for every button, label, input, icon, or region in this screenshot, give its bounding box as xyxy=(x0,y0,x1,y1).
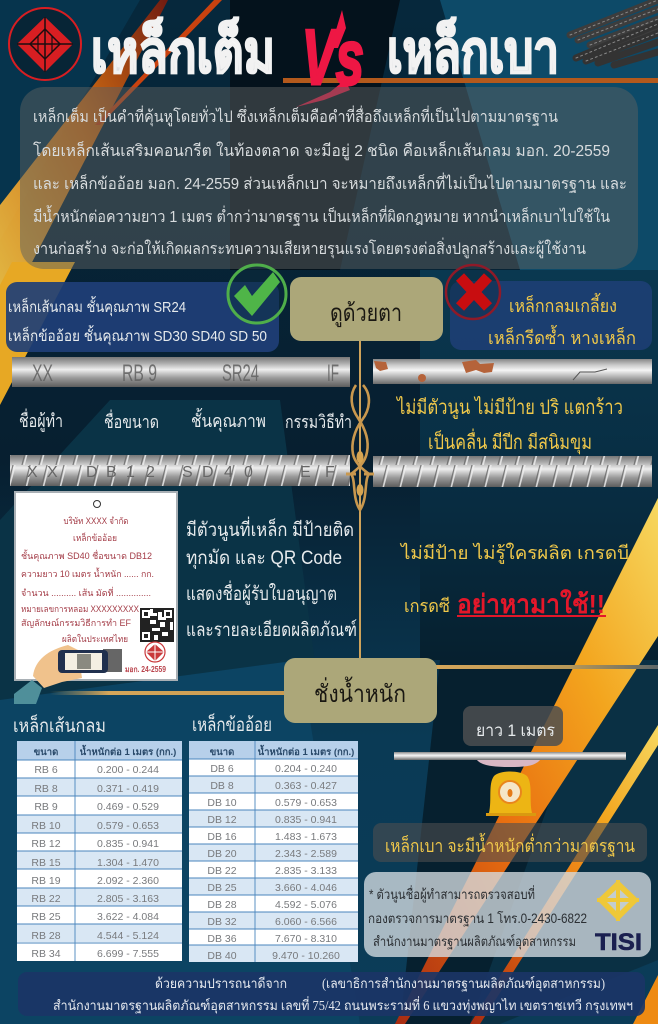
footer xyxy=(18,972,645,1016)
table: deformed bar weights: ขนาด xyxy=(210,747,234,758)
table: deformed bar weights: DB 22 xyxy=(207,865,237,877)
panel: standard steel grades xyxy=(6,282,279,352)
table: round bar weights: RB 25 xyxy=(31,911,61,923)
panel: introduction xyxy=(20,87,638,269)
panel: substandard steel types: เหล็กรีดซ้ำ หางเหล็ก xyxy=(488,325,636,348)
table: round bar weights: 4.544 - 5.124 xyxy=(97,930,159,942)
table: deformed bar weights: 0.363 - 0.427 xyxy=(275,780,337,792)
panel: substandard steel types: เหล็กกลมเกลี้ยง xyxy=(509,293,617,316)
icon: green check xyxy=(228,265,286,323)
marking labels: ชั้นคุณภาพ xyxy=(191,408,266,432)
table: round bar weights: RB 15 xyxy=(31,857,61,869)
card: product tag: จำนวน .......... เส้น มัดที่ .............. xyxy=(21,586,151,598)
icon: scale with bar xyxy=(394,752,626,816)
table: round bar weights: 0.469 - 0.529 xyxy=(97,801,159,813)
title: left: เหล็กเต็ม xyxy=(91,17,275,85)
table: deformed bar weights: DB 20 xyxy=(207,848,237,860)
intro text: เหล็กเต็ม เป็นคำที่คุ้นหูโดยทั่วไป ซึ่งเหล็กเต็มคือคำที่สื่อถึงเหล็กที่เป็นไปตามมาตรฐาน xyxy=(33,105,558,127)
table: deformed bar weights: 3.660 - 4.046 xyxy=(275,882,337,894)
defects description: เป็นคลื่น มีปีก มีสนิมขุม xyxy=(428,428,592,455)
marking labels: ชื่อขนาด xyxy=(104,409,159,432)
table: deformed bar weights: DB 25 xyxy=(207,882,237,894)
icon: QR code xyxy=(140,608,174,642)
table: deformed bar weights: DB 36 xyxy=(207,933,237,945)
table: round bar weights: 2.092 - 2.360 xyxy=(97,875,159,887)
ribbed bar: standard: X xyxy=(27,464,38,481)
table: deformed bar weights: DB 16 xyxy=(207,831,237,843)
tag and QR description: มีตัวนูนที่เหล็ก มีป้ายติด xyxy=(186,516,354,541)
panel: substandard steel types xyxy=(450,281,652,350)
smooth bar: standard: SR24 xyxy=(222,360,259,387)
warning text: เกรดซี xyxy=(404,596,450,616)
table: deformed bar weights: 2.835 - 3.133 xyxy=(275,865,337,877)
VS brush mark xyxy=(296,10,364,107)
callout: light steel underweight xyxy=(373,823,647,862)
icon: hand holding phone xyxy=(14,645,122,704)
table: round bar weights: RB 34 xyxy=(31,948,61,960)
marking labels: ชื่อผู้ทำ xyxy=(19,408,63,432)
footer: (เลขาธิการสำนักงานมาตรฐานผลิตภัณฑ์อุตสาหกรรม) xyxy=(322,975,605,992)
ribbed bar: standard: 4 xyxy=(224,464,233,481)
table: round bar weights: RB 19 xyxy=(31,875,61,887)
card: product tag: เหล็กข้ออ้อย xyxy=(73,531,117,543)
warning text: ไม่มีป้าย ไม่รู้ใครผลิต เกรดบี xyxy=(399,542,629,564)
warning text xyxy=(399,542,629,619)
table: round bar weights: 0.200 - 0.244 xyxy=(97,764,159,776)
ribbed bar: standard: D xyxy=(202,464,214,481)
table: round bar weights: RB 6 xyxy=(34,764,58,776)
table: round bar weights: RB 12 xyxy=(31,838,61,850)
card: product tag: มอก. 24-2559 xyxy=(125,665,166,674)
table: deformed bar weights xyxy=(189,741,358,962)
table: deformed bar weights: 4.592 - 5.076 xyxy=(275,899,337,911)
ribbed bar: standard: X xyxy=(47,464,58,481)
tag and QR description: แสดงชื่อผู้รับใบอนุญาต xyxy=(186,580,337,606)
ribbed bar: substandard xyxy=(373,456,652,487)
icon: TISI logo xyxy=(595,880,642,956)
panel: TISI contact: * ตัวนูนชื่อผู้ทำสามารถตรวจสอบที่ xyxy=(369,885,535,903)
panel: standard steel grades: เหล็กเส้นกลม ชั้นคุณภาพ SR24 xyxy=(8,296,186,317)
panel: TISI contact: กองตรวจการมาตรฐาน 1 โทร.0-2430-6822 xyxy=(368,910,587,927)
table: deformed bar weights: 1.483 - 1.673 xyxy=(275,831,337,843)
ribbed bar: standard: D xyxy=(86,464,98,481)
ribbed bar: standard: B xyxy=(106,464,117,481)
label: one metre length: ยาว 1 เมตร xyxy=(476,721,555,740)
smooth bar: rusted and cracked xyxy=(373,359,652,384)
heading: look by eye xyxy=(290,277,443,341)
table: deformed bar weights: 0.835 - 0.941 xyxy=(275,814,337,826)
card: product tag: หมายเลขการหลอม XXXXXXXXX xyxy=(21,604,139,614)
ribbed bar: standard: E xyxy=(300,464,311,481)
intro text: และ เหล็กข้ออ้อย มอก. 24-2559 ส่วนเหล็กเบา จะหมายถึงเหล็กที่ไม่เป็นไปตามมาตรฐาน และ xyxy=(33,172,627,193)
table: round bar weights: 0.579 - 0.653 xyxy=(97,820,159,832)
table: round bar weights: RB 22 xyxy=(31,893,61,905)
panel: TISI contact: สำนักงานมาตรฐานผลิตภัณฑ์อุตสาหกรรม xyxy=(373,933,576,950)
heading: weigh xyxy=(284,658,437,723)
marking labels: กรรมวิธีทำ xyxy=(285,412,352,432)
table: deformed bar weights: 9.470 - 10.260 xyxy=(272,950,340,962)
icon: TISI logo: TISI xyxy=(595,929,642,956)
heading: look by eye: ดูด้วยตา xyxy=(330,300,402,328)
table: deformed bar weights: 6.060 - 6.566 xyxy=(275,916,337,928)
intro text: โดยเหล็กเส้นเสริมคอนกรีต ในท้องตลาด จะมีอยู่ 2 ชนิด คือเหล็กเส้นกลม มอก. 20-2559 xyxy=(33,140,610,161)
table: round bar weights: 1.304 - 1.470 xyxy=(97,857,159,869)
card: product tag: บริษัท XXXX จำกัด xyxy=(64,516,129,526)
table: round bar weights: RB 8 xyxy=(34,783,58,795)
header rule xyxy=(283,78,658,83)
icon: small TIS logo xyxy=(145,642,165,662)
defects description xyxy=(395,396,623,455)
card: product tag: สัญลักษณ์กรรมวิธีการทำ EF xyxy=(21,617,131,628)
table: round bar weights: ขนาด xyxy=(34,747,58,758)
tag and QR description xyxy=(186,516,357,641)
table: deformed bar weights: DB 32 xyxy=(207,916,237,928)
ornament xyxy=(346,385,374,510)
table: deformed bar weights: 7.670 - 8.310 xyxy=(275,933,337,945)
card: product tag: ผลิตในประเทศไทย xyxy=(62,634,128,644)
smooth bar: standard: XX xyxy=(32,360,53,387)
table: deformed bar weights: 0.579 - 0.653 xyxy=(275,797,337,809)
tag and QR description: และรายละเอียดผลิตภัณฑ์ xyxy=(186,619,357,641)
table: round bar weights: น้ำหนักต่อ 1 เมตร (กก.) xyxy=(80,744,176,758)
table: deformed bar weights: DB 6 xyxy=(210,763,234,775)
title: right: เหล็กเบา xyxy=(387,17,559,85)
table: round bar weights: 3.622 - 4.084 xyxy=(97,911,159,923)
table: round bar weights: RB 10 xyxy=(31,820,61,832)
table: round bar weights: RB 9 xyxy=(34,801,58,813)
table: deformed bar weights: DB 10 xyxy=(207,797,237,809)
intro text: งานก่อสร้าง จะก่อให้เกิดผลกระทบความเสียหายรุนแรงโดยตรงต่อสิ่งปลูกสร้างและผู้ใช้งาน xyxy=(33,237,586,259)
table: deformed bar weights: DB 28 xyxy=(207,899,237,911)
panel: TISI contact xyxy=(364,872,651,957)
heading: round bar table: เหล็กเส้นกลม xyxy=(13,713,106,737)
heading: weigh: ชั่งน้ำหนัก xyxy=(314,676,406,708)
center vertical line xyxy=(359,277,361,662)
ribbed bar: standard: F xyxy=(325,464,335,481)
ribbed bar: standard: 2 xyxy=(146,464,155,481)
ribbed bar: standard: S xyxy=(182,464,193,481)
icon: red standards logo xyxy=(9,8,81,80)
icon: red cross xyxy=(446,265,500,319)
ribbed bar: standard: 1 xyxy=(126,464,135,481)
tag and QR description: ทุกมัด และ QR Code xyxy=(186,548,342,570)
card: product tag: ความยาว 10 เมตร น้ำหนัก ...... กก. xyxy=(21,567,154,579)
card: product tag: ชั้นคุณภาพ SD40 ชื่อขนาด DB12 xyxy=(21,549,152,562)
ribbed bar: standard xyxy=(10,455,350,486)
table: deformed bar weights: 0.204 - 0.240 xyxy=(275,763,337,775)
smooth bar: standard xyxy=(12,357,350,387)
table: round bar weights: 0.835 - 0.941 xyxy=(97,838,159,850)
heading: deformed bar table: เหล็กข้ออ้อย xyxy=(192,712,272,736)
icon: steel bars bundle xyxy=(570,0,658,65)
table: deformed bar weights: DB 8 xyxy=(210,780,234,792)
VS brush mark: Vs xyxy=(302,13,364,101)
smooth bar: standard: RB 9 xyxy=(122,360,157,387)
table: deformed bar weights: น้ำหนักต่อ 1 เมตร (กก.) xyxy=(258,744,354,758)
table: deformed bar weights: DB 12 xyxy=(207,814,237,826)
warning text: อย่าหามาใช้!! xyxy=(457,589,605,619)
table: round bar weights: 2.805 - 3.163 xyxy=(97,893,159,905)
smooth bar: standard: IF xyxy=(327,360,339,387)
gold rules xyxy=(50,665,658,695)
intro text xyxy=(33,105,627,259)
marking labels xyxy=(19,408,352,432)
table: round bar weights: 6.699 - 7.555 xyxy=(97,948,159,960)
table: round bar weights xyxy=(17,741,182,961)
ribbed bar: standard: 0 xyxy=(244,464,253,481)
table: deformed bar weights: 2.343 - 2.589 xyxy=(275,848,337,860)
footer: ด้วยความปรารถนาดีจาก xyxy=(155,976,287,991)
table: deformed bar weights: DB 40 xyxy=(207,950,237,962)
table: round bar weights: RB 28 xyxy=(31,930,61,942)
panel: standard steel grades: เหล็กข้ออ้อย ชั้นคุณภาพ SD30 SD40 SD 50 xyxy=(8,325,267,346)
label: one metre length xyxy=(463,706,563,746)
card: product tag xyxy=(14,492,177,704)
table: round bar weights: 0.371 - 0.419 xyxy=(97,783,159,795)
